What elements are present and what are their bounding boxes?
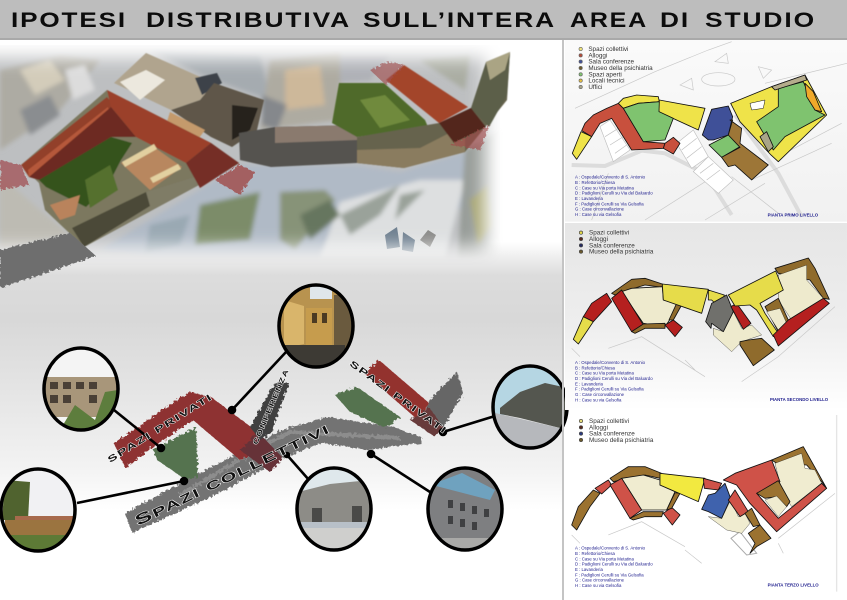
legend: Alloggi [589,236,608,243]
legend: Alloggi [589,424,608,431]
building key [575,546,653,588]
photo circle: palace square [295,468,373,553]
building key [575,175,653,217]
building key: H : Case su via Gelsofia [575,397,622,402]
legend [579,418,654,444]
right column divider [562,40,564,600]
title: DI [660,9,690,32]
building key: C : Case su Via porta Metatina [575,371,634,376]
panel: second level plan [565,223,847,410]
label: spazi privati right: SPAZI PRIVATI [348,359,449,436]
title [11,9,816,32]
title: DISTRIBUTIVA [146,9,351,32]
brush stroke: red right [364,360,429,420]
road brush stroke [0,233,96,288]
building key: B : Refettorio/Chiesa [575,551,616,556]
surrounding city [0,45,500,265]
main buildings [21,52,510,247]
connector lines [77,352,495,503]
building key: B : Refettorio/Chiesa [575,180,616,185]
brush stroke: green right [335,387,400,428]
legend [579,46,653,91]
photo circle: low building with tree [0,469,80,555]
building key: C : Case su Via porta Metatina [575,185,634,190]
building key: F : Padiglioni Cerulli su Via Gelsofia [575,387,644,392]
building key: G : Case circonvallazione [575,392,625,397]
legend: Museo della psichiatria [589,249,654,256]
building footprints [572,447,827,553]
label: spazi privati left: SPAZI PRIVATI [106,392,215,465]
title: AREA [570,9,648,32]
brush stroke: spazi collettivi [125,417,421,533]
brush stroke: conferenza [250,383,289,440]
label: conferenza: CONFERENZA [252,368,291,446]
brush stroke: gray right [425,372,463,427]
header band [0,0,847,40]
building key: H : Case su via Gelsofia [575,212,622,217]
building key: A : Ospedale/Convento di S. Antonio [575,360,646,365]
legend: Spazi collettivi [589,230,629,237]
building key: A : Ospedale/Convento di S. Antonio [575,175,646,180]
title: STUDIO [705,9,816,32]
brush stroke: overlap left [240,432,283,472]
diagram: functional distribution [0,285,568,555]
building key: F : Padiglioni Cerulli su Via Gelsofia [575,572,644,577]
building footprints [572,75,827,180]
panel: third level plan [572,415,837,592]
photo circle: grey building [425,468,505,552]
building key: E : Lavanderia [575,381,604,386]
street map [572,307,835,382]
legend [579,230,654,256]
building key: A : Ospedale/Convento di S. Antonio [575,546,646,551]
brush stroke: green left [153,427,198,480]
panel: first level plan [565,40,847,222]
legend: Sala conferenze [588,59,635,66]
building key: E : Lavanderia [575,567,604,572]
building key: G : Case circonvallazione [575,578,625,583]
building footprints [573,258,829,366]
building key: D : Padiglioni Cerulli su Via del Baluardo [575,191,653,196]
street map [572,42,847,220]
legend: Uffici [588,84,602,91]
plan title: PIANTA TERZO LIVELLO [768,582,819,587]
building key [575,360,653,402]
legend: Sala conferenze [589,431,635,438]
building key: G : Case circonvallazione [575,207,625,212]
legend: Museo della psichiatria [588,65,653,72]
title: SULL’INTERA [363,9,556,32]
legend: Spazi aperti [588,71,622,78]
brush stroke: overlap right [410,407,443,437]
legend: Spazi collettivi [589,418,629,425]
red brush marks [0,62,490,195]
brush stroke: spazi privati left [114,392,262,468]
photo circle: city wall [492,365,568,450]
legend: Museo della psichiatria [589,437,654,444]
building key: H : Case su via Gelsofia [575,583,622,588]
label: spazi collettivi: SPAZI COLLETTIVI [132,420,333,530]
plan title: PIANTA PRIMO LIVELLO [768,212,819,217]
title: IPOTESI [11,9,127,32]
building key: D : Padiglioni Cerulli su Via del Baluardo [575,376,653,381]
street map [572,415,837,592]
legend: Spazi collettivi [588,46,628,53]
photo circle: yellow palace street [278,285,354,370]
building key: F : Padiglioni Cerulli su Via Gelsofia [575,201,644,206]
building key: D : Padiglioni Cerulli su Via del Baluardo [575,562,653,567]
photo circle: courtyard building [42,346,120,432]
legend: Alloggi [588,52,607,59]
building key: C : Case su Via porta Metatina [575,556,634,561]
plan title: PIANTA SECONDO LIVELLO [770,397,829,402]
legend: Locali tecnici [588,78,625,85]
aerial photograph [0,45,510,265]
building key: E : Lavanderia [575,196,604,201]
legend: Sala conferenze [589,242,635,249]
building key: B : Refettorio/Chiesa [575,365,616,370]
